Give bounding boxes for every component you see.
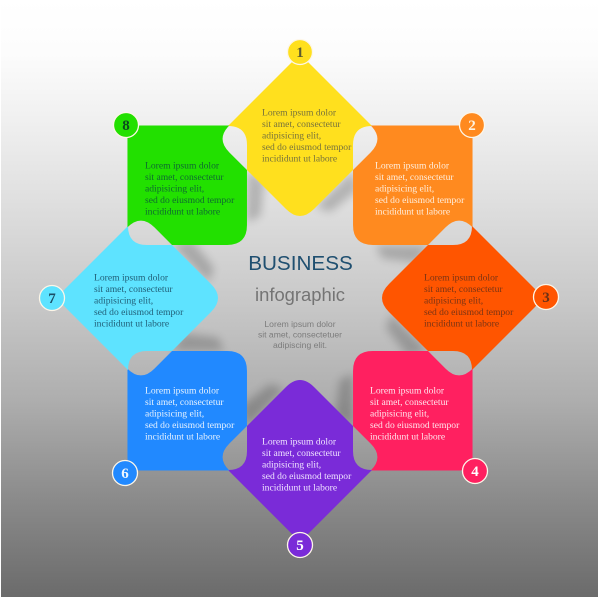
panel: step 5 purple: sed do eiusmod tempor <box>262 471 352 482</box>
panel: step 2 orange: sed do eiusmod tempor <box>375 195 465 206</box>
panel: step 2 orange: adipisicing elit, <box>375 184 434 194</box>
panel: step 6 blue: sit amet, consectetur <box>145 397 224 408</box>
panel: step 3 red-orange: Lorem ipsum dolor <box>424 272 499 284</box>
panel: step 3 red-orange: 3 <box>542 290 550 306</box>
panel: step 8 green: Lorem ipsum dolor <box>145 160 220 172</box>
center description text: sit amet, consectetuer <box>258 330 342 340</box>
panel: step 1 yellow <box>228 40 372 216</box>
panel: step 5 purple: incididunt ut labore <box>262 482 337 494</box>
heading: BUSINESS: BUSINESS <box>248 252 353 275</box>
panel: step 4 pink: sed do eiusmod tempor <box>370 420 460 431</box>
panel: step 7 cyan: 7 <box>48 291 56 307</box>
panel: step 5 purple: 5 <box>296 538 304 554</box>
panel: step 5 purple: sit amet, consectetur <box>262 448 341 459</box>
panel: step 1 yellow: incididunt ut labore <box>262 154 337 164</box>
panel: step 3 red-orange <box>382 226 558 370</box>
panel: step 5 purple: adipisicing elit, <box>262 460 321 470</box>
panel: step 1 yellow: adipisicing elit, <box>262 130 321 142</box>
panel: step 6 blue: incididunt ut labore <box>145 432 220 442</box>
panel: step 5 purple: Lorem ipsum dolor <box>262 436 337 448</box>
panel: step 6 blue: 6 <box>121 466 129 482</box>
panel: step 2 orange: sit amet, consectetur <box>375 172 454 183</box>
panel: step 2 orange: 2 <box>468 118 476 134</box>
panel: step 4 pink: sit amet, consectetur <box>370 397 449 408</box>
panel: step 7 cyan: incididunt ut labore <box>94 318 169 330</box>
panel: step 4 pink: adipisicing elit, <box>370 408 429 420</box>
panel: step 7 cyan: adipisicing elit, <box>94 296 153 306</box>
panel: step 6 blue: sed do eiusmod tempor <box>145 420 235 431</box>
panel: step 7 cyan: sed do eiusmod tempor <box>94 307 184 318</box>
panel: step 8 green: sed do eiusmod tempor <box>145 195 235 206</box>
panel: step 6 blue: Lorem ipsum dolor <box>145 386 220 396</box>
panel: step 4 pink <box>307 305 520 518</box>
center description text: adipiscing elit. <box>273 340 327 350</box>
panel: step 1 yellow: 1 <box>296 45 304 61</box>
panel: step 2 orange: Lorem ipsum dolor <box>375 160 450 172</box>
panel: step 7 cyan: sit amet, consectetur <box>94 284 173 295</box>
panel: step 8 green: 8 <box>122 118 130 134</box>
center description text: Lorem ipsum dolor <box>264 319 336 329</box>
panel: step 6 blue: adipisicing elit, <box>145 408 204 420</box>
panel: step 3 red-orange: adipisicing elit, <box>424 296 483 306</box>
soft shadows at panel junctions <box>168 166 432 430</box>
panel: step 8 green: incididunt ut labore <box>145 206 220 218</box>
panel: step 5 purple <box>228 380 372 558</box>
panel: step 3 red-orange: sit amet, consectetur <box>424 284 503 295</box>
panel: step 3 red-orange: sed do eiusmod tempor <box>424 307 514 318</box>
panel: step 2 orange <box>307 78 520 291</box>
panel: step 4 pink: Lorem ipsum dolor <box>370 386 445 396</box>
panel: step 3 red-orange: incididunt ut labore <box>424 318 499 330</box>
panel: step 8 green <box>80 78 293 291</box>
panel: step 4 pink: 4 <box>471 464 479 480</box>
panel: step 4 pink: incididunt ut labore <box>370 432 445 442</box>
panel: step 1 yellow: sed do eiusmod tempor <box>262 142 352 153</box>
panel: step 8 green: sit amet, consectetur <box>145 172 224 183</box>
panel: step 1 yellow: sit amet, consectetur <box>262 119 341 130</box>
panel: step 8 green: adipisicing elit, <box>145 184 204 194</box>
panel: step 6 blue <box>80 305 293 518</box>
panel: step 7 cyan: Lorem ipsum dolor <box>94 272 169 284</box>
panel: step 2 orange: incididunt ut labore <box>375 206 450 218</box>
subheading: infographic: infographic <box>255 284 345 305</box>
panel: step 1 yellow: Lorem ipsum dolor <box>262 108 337 118</box>
panel: step 7 cyan <box>40 226 218 370</box>
